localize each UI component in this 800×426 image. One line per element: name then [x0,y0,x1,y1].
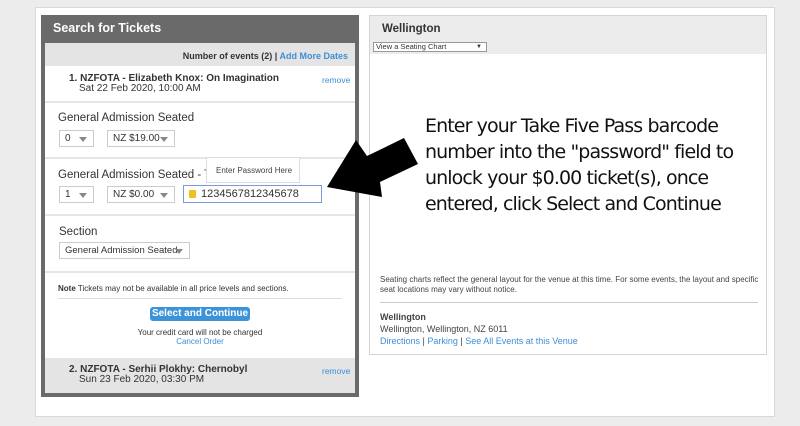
event 2 row: remove [322,366,350,376]
panel: search for tickets [41,15,359,397]
quantity select 2 [59,186,94,203]
ticket type: take five: General Admission Seated - Take [58,169,228,181]
password input: 1234567812345678 [201,188,299,200]
event 2 row: 2. NZFOTA - Serhii Plokhy: Chernobyl [69,364,247,375]
quantity select 1 [59,130,94,147]
seating chart select: ▼ [476,44,482,50]
quantity select 2: 1 [65,189,71,200]
venue address: Wellington, Wellington, NZ 6011 [380,324,508,334]
price select 2: NZ $0.00 [113,189,154,200]
credit card note [138,328,262,346]
seating chart select: View a Seating Chart [376,42,446,51]
panel: venue [369,15,767,355]
event 2 row [45,358,355,393]
remove link 1: remove [322,75,350,85]
price select 1 [107,130,175,147]
price select 1: NZ $19.00 [113,133,160,144]
events count row: Number of events (2) | Add More Dates [183,51,348,61]
credit card note: Your credit card will not be charged [138,328,262,337]
venue header [370,16,766,54]
venue address [380,312,578,346]
button: select and continue: Select and Continue [152,308,248,319]
section select [59,242,190,259]
tooltip: enter password [206,157,300,183]
quantity select 1: 0 [65,133,71,144]
password input [183,185,322,203]
event 1 [69,73,279,94]
section label: Section [59,226,97,238]
inner white area [45,43,355,393]
tooltip: enter password: Enter Password Here [216,166,292,175]
note text: Note Tickets may not be available in all price levels and sections. [58,284,289,293]
event 1: Sat 22 Feb 2020, 10:00 AM [79,83,201,94]
venue title: Wellington [382,23,441,35]
event 2 row: Sun 23 Feb 2020, 03:30 PM [79,374,204,385]
seating disclaimer: Seating charts reflect the general layout for the venue at this time. For some events, the layout and specific seat locations may vary without notice. [380,275,758,294]
venue address: Wellington [380,312,426,322]
event 1: 1. NZFOTA - Elizabeth Knox: On Imagination [69,73,279,84]
price select 2 [107,186,175,203]
seating chart select [373,42,487,52]
section select: General Admission Seated [65,245,177,256]
heading: search for tickets: Search for Tickets [53,21,161,35]
credit card note: Cancel Order [176,337,224,346]
ticket type: general admission: General Admission Seated [58,112,194,124]
venue address: Directions | Parking | See All Events at this Venue [380,336,578,346]
callout text: Enter your Take Five Pass barcode number into the "password" field to unlock your $0.00 ticket(s), once entered, click Select and Continue [425,115,733,215]
events count row [45,43,355,66]
